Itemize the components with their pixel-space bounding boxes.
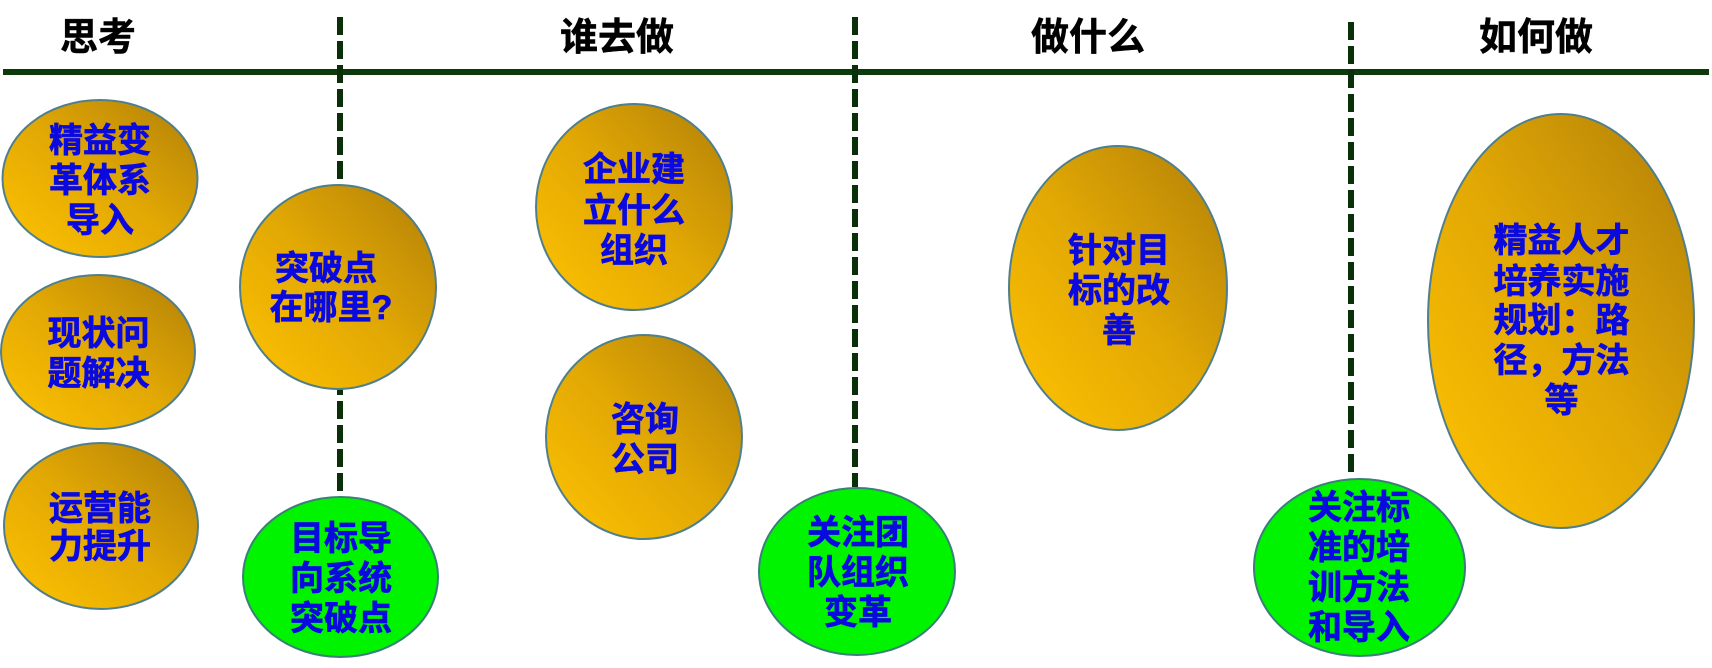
bubble: 企业建立什么组织: 企业建: [583, 151, 685, 189]
bubble: 针对目标的改善: 善: [1102, 312, 1136, 350]
green bubble: 关注团队组织变革: 关注团: [807, 514, 909, 552]
horizontal header rule: [3, 69, 1709, 75]
bubble: 精益人才培养实施规划: 培养实施: [1494, 263, 1630, 301]
bubble: 针对目标的改善: 标的改: [1068, 272, 1170, 310]
green bubble: 目标导向系统突破点: 突破点: [290, 600, 392, 638]
bubble: 精益变革体系导入: 精益变: [49, 122, 151, 160]
dashed divider 3: [1348, 22, 1354, 472]
bubble: 突破点在哪里: 在哪里?: [270, 289, 392, 327]
bubble: 企业建立什么组织: 组织: [600, 232, 668, 270]
bubble: 精益人才培养实施规划: 精益人才: [1494, 222, 1630, 260]
bubble: 精益人才培养实施规划: [1428, 114, 1694, 528]
bubble: 咨询公司: [546, 335, 742, 539]
bubble: 针对目标的改善: 针对目: [1068, 232, 1170, 270]
dashed divider 1 lower: [337, 377, 343, 491]
green bubble: 目标导向系统突破点: 向系统: [290, 560, 392, 598]
heading: 谁去做: 谁去做: [560, 17, 674, 59]
heading: 如何做: 如何做: [1479, 17, 1593, 59]
bubble: 企业建立什么组织: 立什么: [583, 192, 685, 230]
dashed divider 2: [852, 17, 858, 487]
bubble: 精益人才培养实施规划: 等: [1544, 382, 1578, 420]
bubble: 运营能力提升: 力提升: [49, 528, 151, 566]
bubble: 精益人才培养实施规划: 径，方法: [1494, 342, 1630, 380]
bubble: 突破点在哪里: [240, 185, 436, 389]
bubble: 咨询公司: 公司: [611, 441, 679, 479]
bubble: 精益人才培养实施规划: 规划：路: [1494, 302, 1630, 340]
green bubble: 关注标准的培训方法和导入: 训方法: [1308, 569, 1410, 607]
bubble: 精益变革体系导入: [2, 100, 198, 257]
heading: 思考: 思考: [60, 17, 136, 59]
green bubble: 关注团队组织变革: 队组织: [807, 554, 909, 592]
green bubble: 关注团队组织变革: 变革: [824, 594, 892, 632]
green bubble: 关注标准的培训方法和导入: 准的培: [1308, 529, 1410, 567]
green bubble: 关注标准的培训方法和导入: 和导入: [1308, 609, 1410, 647]
bubble: 突破点在哪里: 突破点: [275, 250, 377, 288]
bubble: 运营能力提升: [4, 443, 198, 609]
bubble: 运营能力提升: 运营能: [49, 490, 151, 528]
green bubble: 关注标准的培训方法和导入: 关注标: [1308, 489, 1410, 527]
bubble: 现状问题解决: 题解决: [48, 355, 150, 393]
green bubble: 目标导向系统突破点: 目标导: [290, 520, 392, 558]
green bubble: 关注标准的培训方法和导入: [1254, 479, 1465, 656]
green bubble: 关注团队组织变革: [759, 488, 955, 655]
heading: 做什么: 做什么: [1031, 17, 1145, 59]
bubble: 咨询公司: 咨询: [611, 401, 679, 439]
bubble: 企业建立什么组织: [536, 104, 732, 310]
green bubble: 目标导向系统突破点: [243, 497, 438, 657]
bubble: 现状问题解决: 现状问: [48, 315, 150, 353]
dashed divider 1 upper: [337, 17, 343, 179]
bubble: 现状问题解决: [1, 275, 195, 429]
bubble: 精益变革体系导入: 导入: [66, 202, 134, 240]
bubble: 精益变革体系导入: 革体系: [49, 162, 151, 200]
bubble: 针对目标的改善: [1009, 146, 1227, 430]
